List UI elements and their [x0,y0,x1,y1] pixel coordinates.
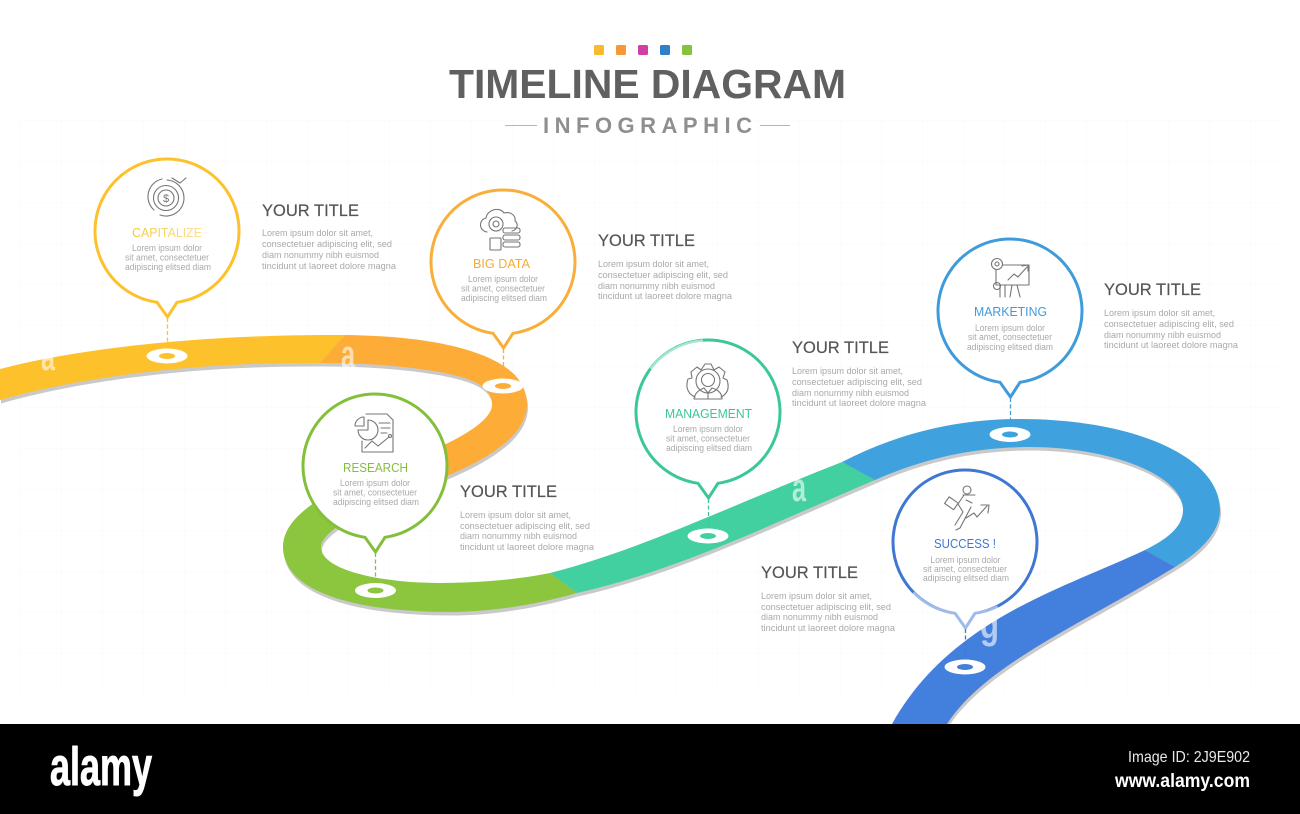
text block 6: tincidunt ut laoreet dolore magna [761,623,896,633]
icon: report document [355,414,393,452]
connector and node [146,318,188,364]
connector and node [944,629,986,674]
description: adipiscing elitsed diam [923,573,1009,583]
watermark letter g: g [980,603,999,647]
text block 2: Lorem ipsum dolor sit amet, [598,259,709,269]
heading: TIMELINE DIAGRAM [449,61,846,107]
alamy logo: alamy [50,737,152,797]
text block 3: Lorem ipsum dolor sit amet, [460,510,571,520]
connector and node [990,398,1030,442]
text block 3: tincidunt ut laoreet dolore magna [460,542,595,552]
watermark letters [41,333,806,510]
pin [303,394,447,552]
connector and node [482,349,524,394]
pin [893,470,1037,628]
text block 5: tincidunt ut laoreet dolore magna [1104,340,1239,350]
description: sit amet, consectetuer [461,284,545,294]
description [967,323,1053,352]
pin [431,190,575,348]
label: MARKETING [974,305,1047,319]
text block 3: consectetuer adipiscing elit, sed [460,521,590,531]
text block 2: consectetuer adipiscing elit, sed [598,270,728,280]
description: adipiscing elitsed diam [333,497,419,507]
text block 3 [460,482,595,552]
subheading: INFOGRAPHIC [543,113,752,138]
description [125,243,211,272]
milestone 5: marketing [938,239,1082,442]
text block 2: tincidunt ut laoreet dolore magna [598,291,733,301]
text block 6 [761,563,896,633]
watermark letters: a [41,335,55,379]
road segment: yellow [0,335,345,400]
text block 5: YOUR TITLE [1104,280,1201,299]
description: sit amet, consectetuer [125,252,209,262]
text block 1: tincidunt ut laoreet dolore magna [262,261,397,271]
watermark letters: a [792,466,806,510]
icon: dollar target: $ [163,193,169,205]
road segment: green [283,455,577,612]
description: Lorem ipsum dolor [930,555,1000,565]
milestone 2: big data [431,190,575,394]
pin [636,340,780,498]
description: Lorem ipsum dolor [468,274,538,284]
text block 4: consectetuer adipiscing elit, sed [792,377,922,387]
description: Lorem ipsum dolor [673,424,743,434]
text block 3: YOUR TITLE [460,482,557,501]
milestone 6: success [893,470,1037,674]
text block 4: Lorem ipsum dolor sit amet, [792,366,903,376]
website: www.alamy.com [1114,771,1250,792]
text block 6: YOUR TITLE [761,563,858,582]
text block 5: diam nonummy nibh euismod [1104,330,1221,340]
description [666,424,752,453]
description [333,478,419,507]
description: adipiscing elitsed diam [666,443,752,453]
connector and node [688,499,728,544]
description: Lorem ipsum dolor [340,478,410,488]
label: BIG DATA [473,257,531,271]
road shadow [1,338,1221,728]
title block [449,45,846,138]
text block 1: Lorem ipsum dolor sit amet, [262,228,373,238]
text block 4: diam nonummy nibh euismod [792,388,909,398]
description: sit amet, consectetuer [968,332,1052,342]
icon: runner with rising arrow [945,486,989,530]
text block 5 [1104,280,1239,350]
road segment: teal [550,462,875,593]
icon: presentation board [992,258,1029,297]
text block 6: Lorem ipsum dolor sit amet, [761,591,872,601]
icon: cloud data [480,209,520,250]
description: Lorem ipsum dolor [132,243,202,253]
text block 5: consectetuer adipiscing elit, sed [1104,319,1234,329]
description: Lorem ipsum dolor [975,323,1045,333]
description [923,555,1009,583]
image id: Image ID: 2J9E902 [1128,749,1250,766]
text block 5: Lorem ipsum dolor sit amet, [1104,308,1215,318]
text block 4: tincidunt ut laoreet dolore magna [792,398,927,408]
pin [95,159,239,317]
road segment: dark blue [892,550,1175,724]
icon: gear person [687,364,728,399]
text block 4: YOUR TITLE [792,338,889,357]
road segment: blue [842,419,1220,567]
text block 3: diam nonummy nibh euismod [460,531,577,541]
label: SUCCESS ! [934,537,996,551]
label: RESEARCH [343,461,408,475]
text block 1: diam nonummy nibh euismod [262,250,379,260]
description: sit amet, consectetuer [333,488,417,498]
text block 6: diam nonummy nibh euismod [761,612,878,622]
text block 1 [262,201,397,271]
description: sit amet, consectetuer [923,564,1007,574]
description: adipiscing elitsed diam [461,293,547,303]
road segment: orange [320,335,527,483]
text block 6: consectetuer adipiscing elit, sed [761,602,891,612]
description: sit amet, consectetuer [666,434,750,444]
text block 1: YOUR TITLE [262,201,359,220]
watermark letters: a [341,333,355,377]
description: adipiscing elitsed diam [125,262,211,272]
pin [938,239,1082,397]
connector and node [355,553,396,598]
winding road timeline [0,333,1221,728]
text block 1: consectetuer adipiscing elit, sed [262,239,392,249]
label: MANAGEMENT [665,407,752,421]
description [461,274,547,303]
label: CAPITALIZE [132,226,202,240]
footer bar [0,724,1300,814]
colour squares [594,45,692,55]
description: adipiscing elitsed diam [967,342,1053,352]
milestone 4: management [636,340,780,544]
milestone 1: capitalize [95,159,239,364]
text block 2 [598,231,733,301]
milestone 3: research [303,394,447,598]
icon: dollar target [148,178,186,216]
text block 2: YOUR TITLE [598,231,695,250]
text block 4 [792,338,927,408]
text block 2: diam nonummy nibh euismod [598,281,715,291]
